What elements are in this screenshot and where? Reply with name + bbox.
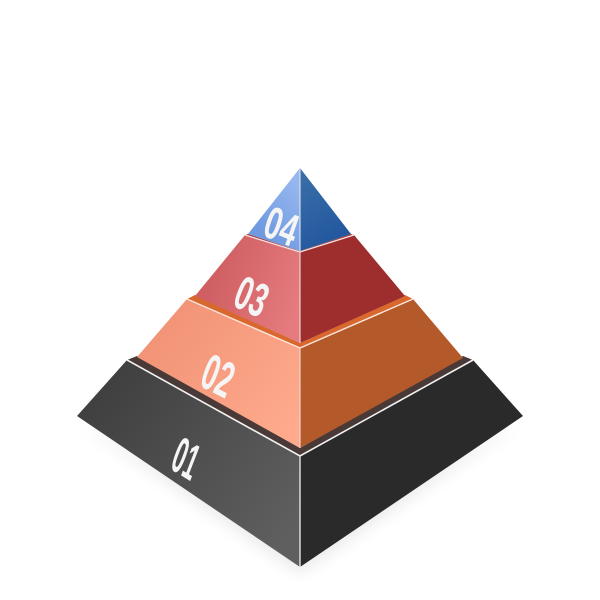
tier 03 centre edge [299, 252, 301, 343]
tier 02 left face [137, 299, 300, 448]
base left face [77, 360, 300, 567]
label 02: 02 [194, 342, 242, 409]
apex right face [300, 168, 351, 251]
tier 01: dark base [77, 356, 523, 567]
tier 03 top ledge [245, 234, 354, 252]
label 01: 01 [165, 427, 206, 492]
base right face [300, 360, 523, 567]
base edge highlights [127, 360, 473, 456]
tier 03: red [195, 234, 405, 343]
ground shadow [75, 420, 525, 574]
tier 02: orange [137, 295, 463, 448]
tier 02 centre edge [299, 348, 301, 448]
tier 03 right face [300, 235, 405, 343]
apex centre edge [299, 168, 301, 251]
tier 03 edge highlights [245, 235, 354, 252]
label 03: 03 [227, 266, 276, 328]
base centre edge [299, 456, 301, 567]
tier 04: blue apex [248, 168, 351, 257]
tier 02 top ledge [187, 295, 413, 348]
tier 02 edge highlights [187, 299, 413, 348]
label 04: 04 [257, 197, 305, 257]
tier 02 right face [300, 299, 463, 448]
tier 03 left face [195, 235, 300, 343]
base top ledge [127, 356, 473, 456]
apex left face [248, 168, 300, 251]
